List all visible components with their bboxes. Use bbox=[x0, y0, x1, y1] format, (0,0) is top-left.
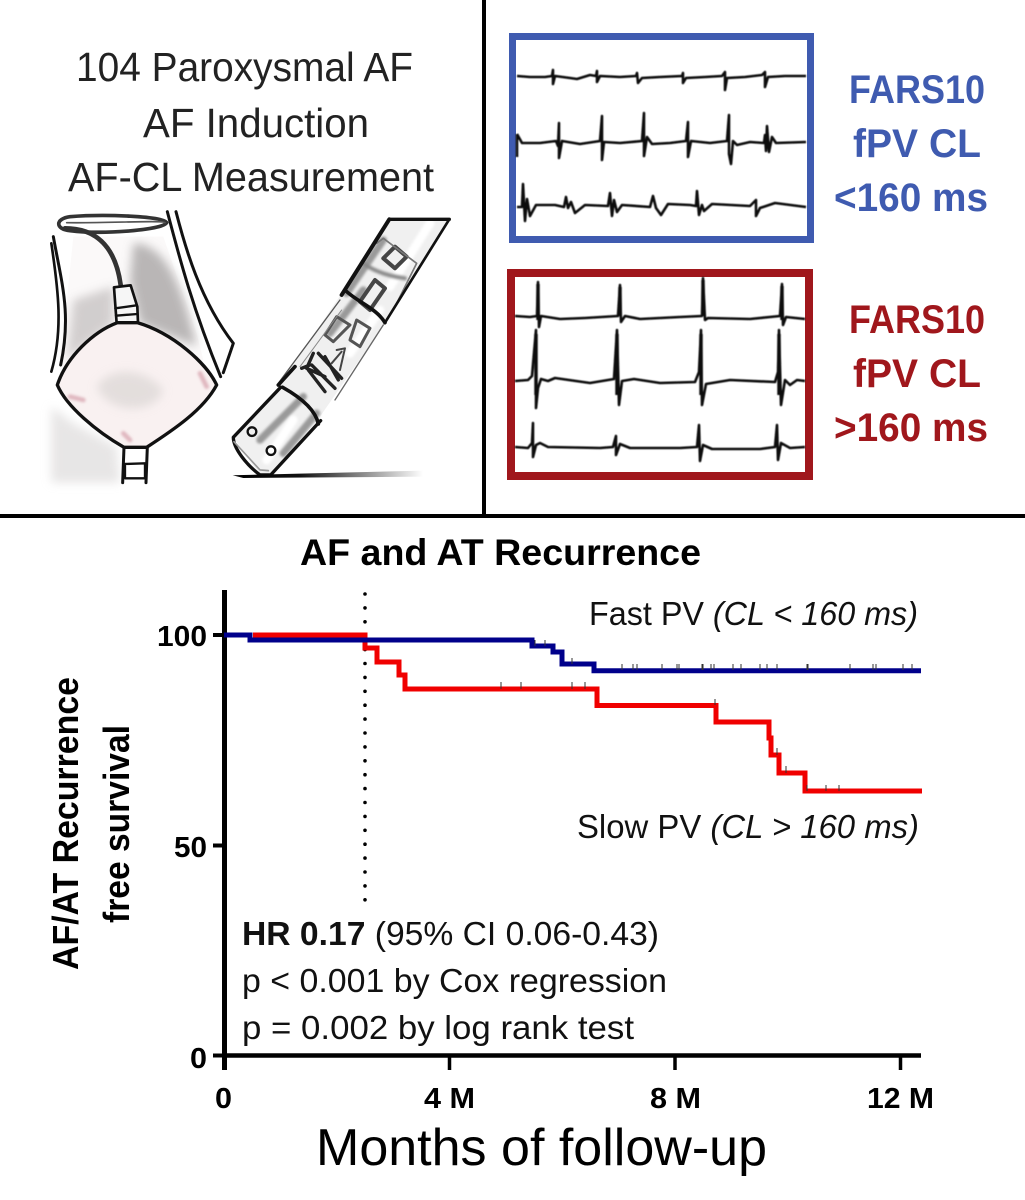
y axis tick labels: 50 bbox=[174, 832, 207, 864]
statistics text block: p = 0.002 by log rank test bbox=[242, 1009, 634, 1046]
x axis tick labels: 8 M bbox=[650, 1083, 701, 1115]
series label: fast PV: Fast PV (CL < 160 ms) bbox=[589, 595, 918, 632]
fast PV survival curve bbox=[224, 635, 921, 671]
label: FARS10 fPV CL below 160 ms bbox=[834, 68, 988, 220]
y axis title bbox=[45, 677, 137, 970]
y axis title: AF/AT Recurrence bbox=[45, 677, 86, 970]
redraw of blue line over red at crossover bbox=[362, 638, 368, 642]
slow PV survival curve bbox=[253, 635, 922, 791]
x axis tick labels: 0 bbox=[215, 1083, 232, 1115]
icon: cryoballoon catheter bbox=[51, 212, 233, 483]
label: FARS10 fPV CL below 160 ms: FARS10 bbox=[849, 68, 985, 112]
blue bordered electrogram box bbox=[512, 36, 810, 240]
chart title: AF and AT Recurrence bbox=[300, 532, 701, 573]
label: FARS10 fPV CL below 160 ms: <160 ms bbox=[834, 176, 988, 220]
x axis tick labels: 4 M bbox=[424, 1083, 475, 1115]
series label: slow PV: Slow PV (CL > 160 ms) bbox=[577, 808, 919, 845]
y axis tick labels: 0 bbox=[190, 1043, 207, 1075]
label: FARS10 fPV CL above 160 ms: >160 ms bbox=[834, 406, 988, 450]
red bordered electrogram box bbox=[511, 273, 809, 476]
y axis title: free survival bbox=[96, 725, 137, 923]
statistics text block bbox=[242, 915, 667, 1046]
heading: study protocol text: AF-CL Measurement bbox=[68, 154, 435, 200]
label: FARS10 fPV CL above 160 ms: fPV CL bbox=[853, 352, 981, 396]
heading: study protocol text: AF Induction bbox=[143, 100, 369, 146]
y axis tick labels bbox=[157, 621, 207, 1075]
statistics text block: HR 0.17 (95% CI 0.06-0.43) bbox=[242, 915, 659, 952]
x axis title: Months of follow-up bbox=[316, 1119, 767, 1177]
icon: circular mapping catheter tip bbox=[233, 219, 449, 478]
panel: fast PV electrogram bbox=[512, 36, 988, 240]
panel: slow PV electrogram bbox=[511, 273, 988, 476]
y axis tick labels: 100 bbox=[157, 621, 207, 653]
statistics text block: p < 0.001 by Cox regression bbox=[242, 962, 667, 999]
axes with ticks bbox=[213, 590, 921, 1070]
dotted landmark line bbox=[363, 594, 367, 905]
heading: study protocol text bbox=[68, 44, 435, 200]
label: FARS10 fPV CL above 160 ms: FARS10 bbox=[849, 298, 985, 342]
panel: study protocol bbox=[51, 44, 449, 483]
x axis tick labels bbox=[215, 1083, 934, 1115]
x axis tick labels: 12 M bbox=[867, 1083, 934, 1115]
heading: study protocol text: 104 Paroxysmal AF bbox=[76, 44, 413, 90]
label: FARS10 fPV CL above 160 ms bbox=[834, 298, 988, 450]
panel: survival chart bbox=[45, 532, 934, 1177]
label: FARS10 fPV CL below 160 ms: fPV CL bbox=[853, 122, 981, 166]
